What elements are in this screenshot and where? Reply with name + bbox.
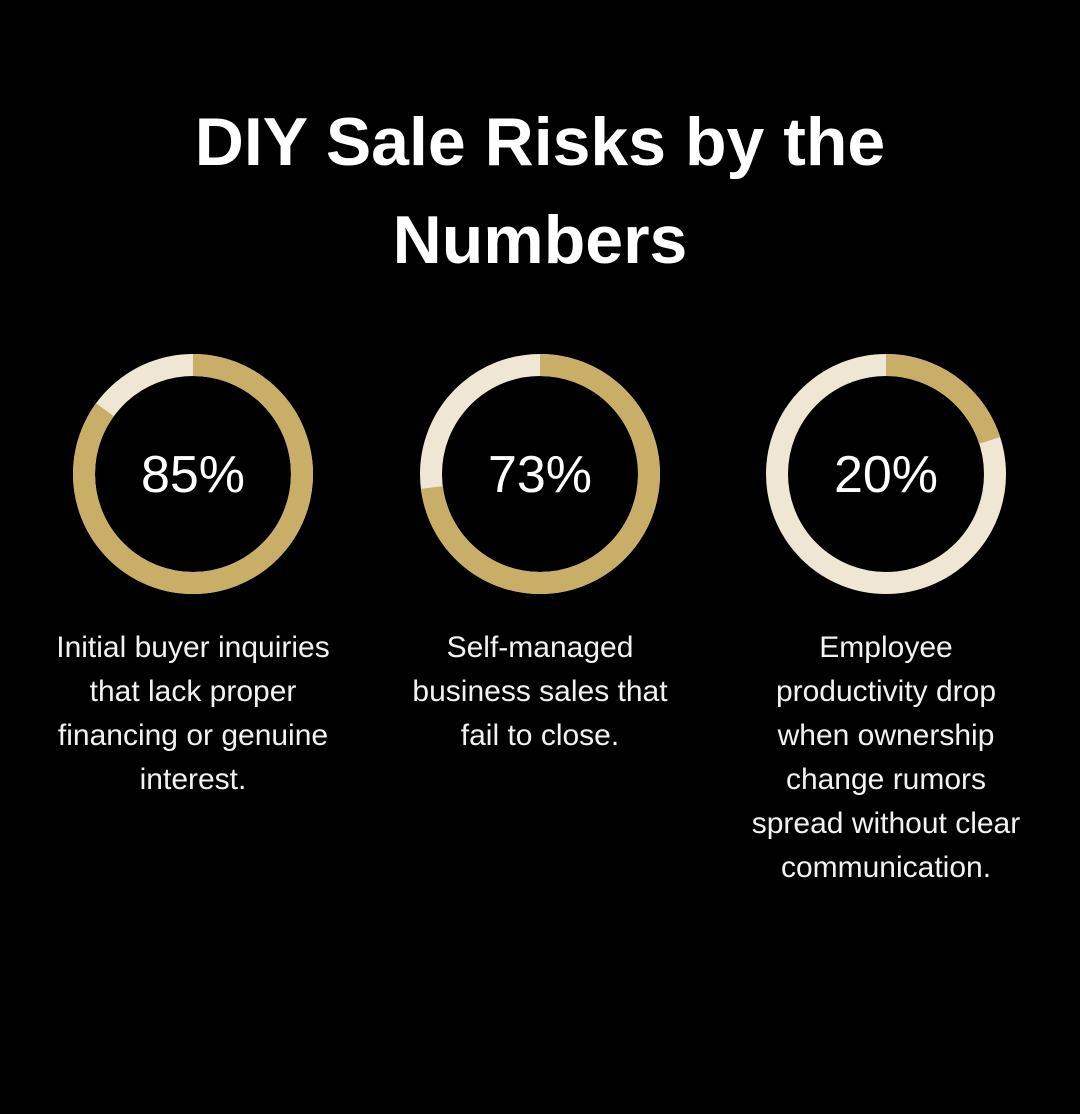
text: 73% description: fail to close. [461, 719, 619, 752]
text: 20% description: change rumors [786, 763, 986, 796]
text: 85% description: financing or genuine [58, 719, 328, 752]
donut: 85% [73, 354, 313, 594]
donut: 73% [420, 354, 660, 594]
text: 73% description: business sales that [412, 675, 668, 708]
donut: 73%: 73% [488, 446, 592, 504]
title: DIY Sale Risks by the [195, 104, 885, 180]
title: Numbers [393, 202, 687, 278]
title [195, 104, 885, 278]
donut: 20% [766, 354, 1006, 594]
text: 85% description [56, 631, 330, 796]
text: 20% description: productivity drop [776, 675, 996, 708]
text: 20% description [752, 631, 1020, 884]
donut: 85%: 85% [141, 446, 245, 504]
text: 20% description: Employee [819, 631, 953, 664]
text: 20% description: communication. [781, 851, 991, 884]
text: 85% description: interest. [140, 763, 246, 796]
text: 73% description: Self-managed [447, 631, 633, 664]
text: 20% description: when ownership [778, 719, 994, 752]
text: 85% description: Initial buyer inquiries [56, 631, 330, 664]
donut: 20%: 20% [834, 446, 938, 504]
text: 73% description [412, 631, 668, 752]
text: 20% description: spread without clear [752, 807, 1020, 840]
text: 85% description: that lack proper [90, 675, 296, 708]
